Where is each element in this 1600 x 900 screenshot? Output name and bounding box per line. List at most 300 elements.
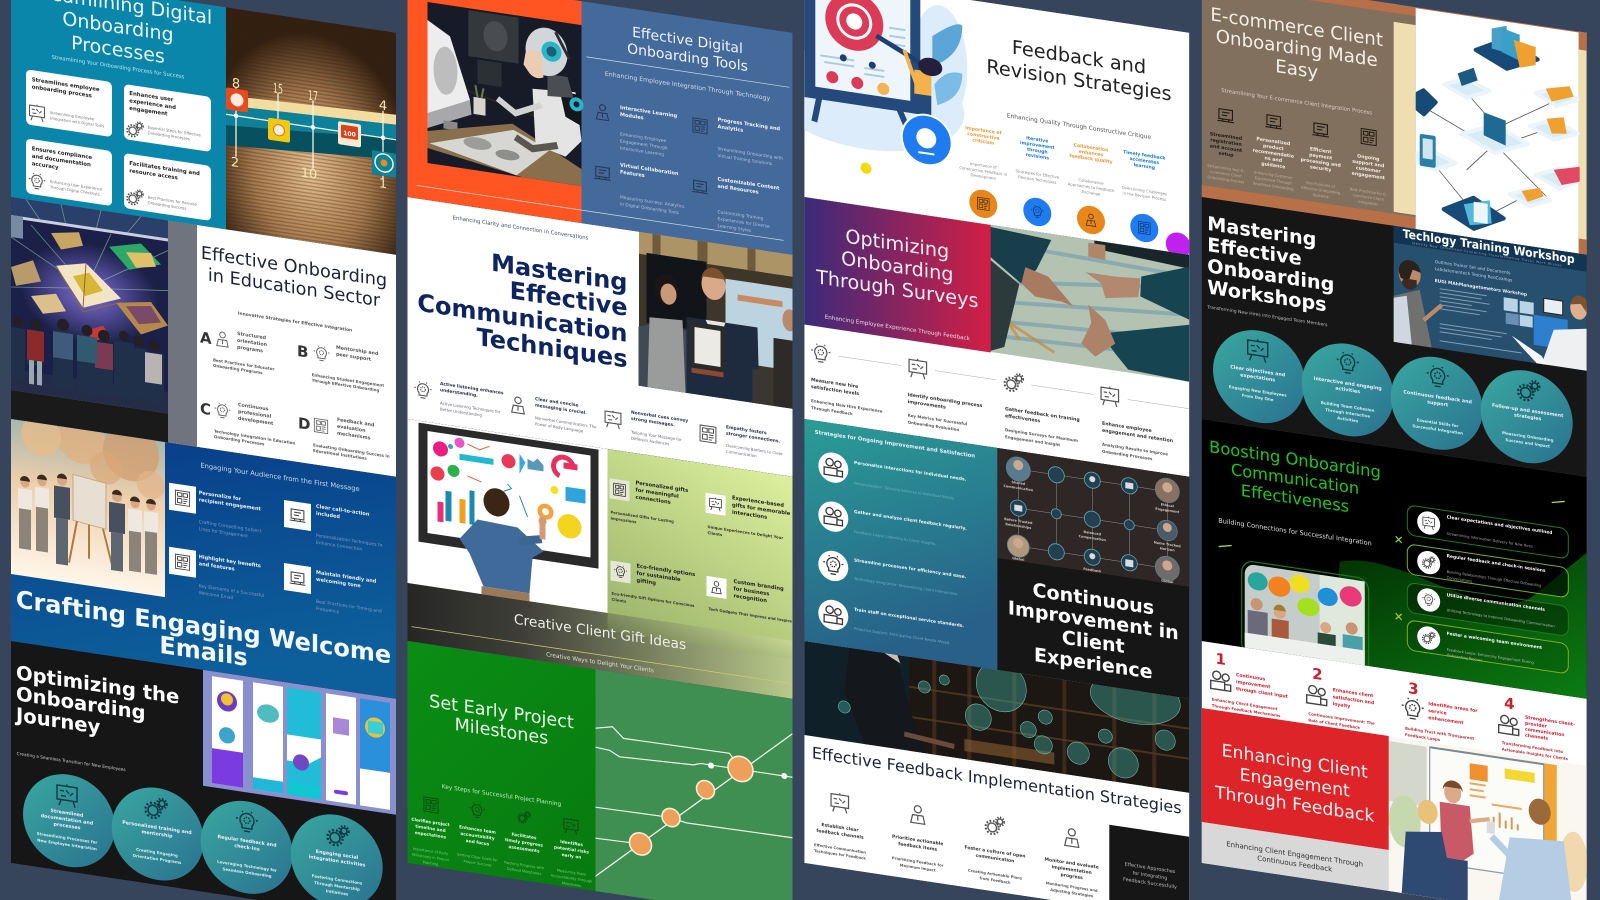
feature: recommendations [1253, 113, 1295, 192]
circle 1 [23, 774, 114, 868]
item: personalize: Personalize interactions for individual needs. [854, 460, 967, 483]
item: streamline processes: Technology Integration: Streamlining Client Interactions [853, 577, 957, 596]
benefit 2: 2 [1312, 665, 1323, 684]
card 1: onboarding process [32, 84, 92, 99]
circle 1: processes [54, 821, 81, 831]
subtitle: Engaging Your Audience from the First Message [200, 461, 360, 493]
circle 3: Seamless Onboarding [222, 866, 272, 879]
item: tracking and analytics: Streamlining Onboarding with [718, 146, 783, 162]
bubbles photo [804, 624, 1189, 793]
benefit 2 [1307, 664, 1375, 732]
item B [298, 345, 384, 392]
step: process improvements: Identify onboarding process [908, 392, 982, 409]
team photo with speech bubbles [1242, 560, 1369, 674]
title: E-commerce Client [1210, 4, 1383, 51]
subtitle: Creative Ways to Delight Your Clients [546, 652, 654, 674]
people network image: Relationships [1005, 522, 1031, 530]
step: satisfaction levels: Measure new hire [811, 377, 858, 390]
item D: evaluation [337, 424, 366, 434]
award photo [638, 232, 796, 409]
target illustration [764, 0, 967, 189]
benefit 1: Enhancing Client Engagement [1212, 697, 1278, 711]
strategy: prioritize items: Prioritizing Feedback for [892, 856, 944, 868]
item: learning modules [596, 101, 678, 160]
step: training effectiveness: Engagement and Insight [1005, 434, 1060, 447]
item C: Continuous [238, 402, 269, 413]
circle 1: New Employee Integration [37, 837, 97, 851]
item: welcoming team: Feedback Loops: Enhancing Engagement During [1447, 648, 1534, 665]
circle 4: Initiatives [326, 888, 349, 897]
feature: recommendations: recommendatio [1253, 148, 1295, 160]
heading: Strategies for Ongoing Improvement and Satisfaction [815, 430, 975, 460]
column 1 [11, 0, 396, 900]
title: Revision Strategies [986, 55, 1172, 106]
feature: recommendations: Seamless Onboarding [1253, 181, 1294, 192]
panel: Optimizing Onboarding Through Surveys [804, 197, 1189, 477]
card 1: Streamlining Employee [50, 110, 95, 122]
timeline image: 10 [301, 166, 317, 183]
title panel [1202, 708, 1389, 891]
title: Mastering [491, 249, 627, 297]
strategy: monitor progress: Monitor and evaluate [1045, 857, 1099, 871]
feature: registration: and account [1210, 143, 1243, 154]
step 4: early on [562, 852, 581, 861]
training workshop image: Techlogy Training Workshop [1403, 227, 1575, 266]
item: personalize [818, 450, 967, 503]
item: clear messaging: Power of Body Language [535, 421, 584, 433]
item: call-to-action: included [316, 511, 340, 520]
card 3: and documentation [32, 154, 91, 168]
feature: registration: setup [1219, 151, 1234, 159]
step 2: accountability [460, 831, 495, 842]
item A [200, 332, 274, 374]
step: process improvements: Key Metrics for Successful [908, 413, 968, 427]
step 4: Accountability Through [551, 874, 592, 884]
strategy: prioritize items: Maximum Impact [900, 863, 936, 873]
column: constructive criticism [959, 124, 1008, 222]
feature: payment: Key Features of [1306, 181, 1336, 189]
timeline image [226, 7, 396, 255]
item: key benefits: and features [199, 561, 235, 573]
circle 4 [291, 808, 383, 900]
item: regular feedback: Building Relationships Through Effective Onboarding [1447, 570, 1541, 588]
step: training effectiveness: Designing Surveys for Maximum [1005, 427, 1078, 443]
item: regular feedback [1407, 544, 1568, 598]
step: engagement and retention: Enhance employee [1102, 421, 1152, 434]
step 3: assessments [508, 844, 540, 855]
panel: Crafting Engaging Welcome Emails [11, 405, 396, 699]
item: personalized gifts [610, 476, 688, 532]
people network image: Horizon [1160, 546, 1175, 553]
item A: orientation [237, 338, 268, 348]
benefit 4: channels [1525, 733, 1548, 742]
item: call-to-action [284, 500, 382, 551]
item: clear expectations: Streamlining Information Delivery for New Hires [1447, 532, 1533, 549]
benefit 1 [1211, 649, 1289, 719]
item: tracking and analytics: Virtual Training Solutions [718, 153, 773, 167]
item: custom branding: recognition [734, 593, 767, 604]
step 1: expectations [415, 830, 447, 841]
item: personalized gifts: Personalized gifts [636, 480, 688, 494]
item B: B [297, 342, 308, 362]
item D: mechanisms [337, 431, 371, 442]
benefit 3: Building Trust with Transparent [1405, 726, 1474, 741]
title: Workshops [1207, 276, 1327, 316]
step 1: Planning [423, 860, 438, 867]
feature: payment: Efficient [1310, 146, 1332, 156]
benefit 3 [1402, 678, 1478, 748]
people network image: Ethical [1161, 502, 1174, 508]
panel: Continuous Improvement in Client Experience [804, 419, 1189, 699]
item: learning modules: Interactive Learning [620, 105, 678, 120]
item: experience-based gifts [706, 491, 791, 547]
circle 4 [1481, 364, 1573, 470]
timeline image: 100 [343, 130, 356, 139]
item: empathy [700, 420, 783, 462]
title: Enhancing Client [1222, 741, 1368, 783]
item: eco-friendly options [610, 559, 695, 614]
people network image: Communication [1003, 484, 1034, 492]
step 4: Milestones [562, 881, 581, 888]
subtitle box: Effective Approaches [1125, 862, 1176, 875]
benefit 1: through client input [1236, 686, 1289, 700]
circle 2 [1302, 337, 1394, 443]
circle 1: Clear objectives and [1230, 364, 1286, 379]
step: engagement and retention: engagement and retention [1102, 428, 1173, 444]
title: Effective [1207, 233, 1302, 270]
item: key benefits [169, 546, 264, 600]
item: nonverbal cues: Tailoring Your Message for [630, 429, 682, 442]
subtitle box: Feedback Successfully [1123, 877, 1177, 891]
card 1 [26, 69, 112, 137]
item A: Structured [237, 331, 267, 341]
subtitle box: for Integrating [1133, 870, 1167, 882]
column: collaboration [1068, 142, 1115, 238]
circle 1: Streamlined [51, 808, 84, 819]
title: Through Surveys [815, 265, 978, 313]
item A: programs [237, 345, 263, 354]
step 2: Project Success [464, 859, 492, 868]
benefit 4: Transforming Feedback into [1502, 740, 1563, 754]
item C: development [238, 416, 274, 427]
subtitle: Enhancing Client Engagement Through [1226, 839, 1363, 869]
column: timely feedback [1122, 149, 1167, 245]
subtitle: Key Steps for Successful Project Planning [442, 784, 561, 808]
feature: payment: payment [1309, 152, 1333, 162]
column: collaboration: feedback quality [1069, 153, 1113, 165]
subtitle: Creating a Seamless Transition for New Employees [17, 751, 126, 773]
item: key benefits: Welcome Email [199, 590, 233, 601]
item: call-to-action: Enhance Connection [316, 540, 362, 553]
item C: C [200, 399, 211, 419]
strategy: open communication: communication [976, 853, 1014, 864]
feature: support [1350, 127, 1388, 208]
title: in Education Sector [208, 265, 381, 311]
benefit 1: 1 [1215, 650, 1226, 669]
step 2: Enhances team [459, 824, 496, 836]
column: timely feedback: Overcoming Challenges [1122, 185, 1167, 196]
item: personalized gifts: Personalized Gifts for Lasting [610, 509, 674, 524]
column: collaboration: enhances [1079, 149, 1104, 158]
feature: recommendations: Enhancing Customer [1254, 170, 1293, 180]
panel: Creative Client Gift Ideas [408, 419, 792, 699]
item: nonverbal cues: Nonverbal cues convey [631, 410, 688, 424]
column: collaboration: Collaboration [1074, 142, 1108, 154]
title: Set Early Project [429, 692, 574, 733]
step 3 [503, 808, 544, 876]
circle 1: Engaging New Employees [1229, 384, 1287, 398]
people network image: Compensation [1079, 534, 1107, 542]
circle 3: check-ins [234, 843, 260, 853]
strategy: clear channels: Effective Communication [814, 843, 866, 855]
card 2 [124, 84, 211, 152]
strategy: prioritize items [892, 802, 944, 874]
circle 1: Streamlining Processes for [37, 831, 97, 845]
feature: support: Integration [1358, 200, 1379, 207]
item: personalized gifts: for meaningful [636, 487, 679, 500]
item C: Technology Integration in Education [214, 428, 295, 446]
benefit 3: enhancement [1428, 715, 1464, 726]
item: experience-based gifts: interactions [732, 510, 767, 521]
strategy: open communication: from Feedback [980, 876, 1011, 885]
item: clear messaging [512, 393, 597, 435]
item A: A [200, 328, 212, 348]
circle 4: Engaging social [316, 849, 359, 861]
feature: support: Ongoing [1357, 153, 1379, 163]
title: Onboarding [1207, 254, 1334, 296]
title: Onboarding [16, 682, 146, 725]
card 2: Enhances user [129, 91, 174, 103]
item D [299, 417, 390, 460]
circle 1 [1213, 324, 1305, 429]
column: collaboration: Approaches to Feedback [1068, 181, 1115, 193]
item: feedback analysis: Gather and analyze client feedback regularly. [854, 509, 967, 532]
training workshop image: Outlines Trainer Set and Documents [1435, 259, 1510, 275]
circle 4: Measuring Onboarding [1502, 430, 1554, 443]
title: Journey [14, 703, 100, 739]
title: Emails [159, 631, 248, 672]
circle 4: Follow-up and assessment [1492, 403, 1564, 419]
title: Optimizing [845, 225, 949, 263]
title: Effective Onboarding [201, 243, 387, 291]
feature: registration: Streamlining Your E- [1207, 164, 1245, 174]
timeline image: 15 [273, 81, 283, 98]
item: experience-based gifts: Experience-based [732, 495, 784, 509]
step 1: Milestones in Project [412, 853, 450, 862]
item D: Evaluating Onboarding Success in [313, 442, 390, 459]
circle 2: Activities [1337, 415, 1359, 424]
item: eco-friendly options: Clients [612, 597, 627, 604]
benefit 1: Through Feedback Mechanisms [1212, 703, 1281, 718]
step 3: Tracking Progress with [503, 860, 544, 870]
title: Boosting Onboarding [1209, 437, 1381, 482]
panel: Effective Digital Onboarding Tools [408, 0, 792, 255]
panel: Effective Feedback Implementation Strategies [804, 624, 1189, 900]
item: active listening [414, 377, 504, 421]
item: custom branding: Tech Gadgets That Impress and Inspire [708, 606, 792, 624]
people network image: Name Tracked [1154, 540, 1181, 549]
item: friendly tone: welcoming tone [316, 577, 361, 590]
subtitle box [1109, 825, 1189, 900]
whiteboard watercolor image [1389, 736, 1588, 900]
item: friendly tone [284, 563, 382, 614]
strategy: clear channels: feedback channels [816, 828, 864, 841]
panel: Streamlining Digital Onboarding Processes [11, 0, 396, 255]
feature: recommendations: Experience Through [1255, 176, 1293, 186]
strategy: prioritize items: feedback items [898, 841, 937, 853]
item: eco-friendly options: for sustainable [637, 571, 681, 583]
item D: D [298, 414, 310, 434]
column: timely feedback: learning [1134, 162, 1155, 171]
strategy: open communication: Creating Actionable Plans [968, 869, 1023, 881]
panel: Effective Onboarding in Education Sector [11, 197, 396, 477]
subtitle: Streamlining Your E-commerce Client Integration Process [1221, 88, 1372, 117]
feature: support: engagement [1352, 171, 1386, 182]
people network image: Before Trusted [1004, 517, 1033, 525]
step: satisfaction levels [811, 343, 883, 421]
title: Effective [510, 276, 627, 322]
item B: Enhancing Student Engagement [312, 372, 384, 388]
benefit 4: Actionable Insights for Clients [1502, 746, 1569, 761]
item D: Educational Institutions [313, 448, 367, 461]
item: personalize: Lines for Engagement [199, 526, 248, 540]
item: friendly tone: Best Practices for Timing and [316, 599, 382, 615]
step 1 [411, 795, 450, 868]
title: Client [1062, 626, 1125, 658]
circle 3 [200, 800, 292, 894]
panel: Mastering Effective Communication Techniques [408, 197, 796, 477]
item: communication channels: Utilizing Technology to Improve Onboarding Communication [1447, 608, 1555, 628]
title: Onboarding [841, 247, 953, 286]
subtitle: Streamlining Your Onboarding Process for Success [52, 55, 185, 81]
item B: peer support [336, 352, 372, 363]
item C: Onboarding Processes [214, 434, 265, 447]
item: feedback analysis [818, 499, 967, 552]
item: welcoming team: Onboarding Process [1447, 653, 1483, 663]
step: satisfaction levels: satisfaction levels [811, 384, 859, 397]
item: tracking and analytics: Progress Tracking and [718, 117, 781, 132]
item: call-to-action: Clear call-to-action [316, 504, 370, 518]
item: key benefits: Highlight key benefits [199, 554, 261, 569]
title: Continuous [1033, 578, 1154, 619]
panel: Optimizing the Onboarding Journey [11, 641, 396, 900]
subtitle: Enhancing Employee Integration Through Technology [605, 71, 770, 102]
step 4: potential risks [554, 844, 589, 856]
item: active listening: Active listening enhances [440, 381, 504, 396]
title: Optimizing the [16, 661, 179, 709]
item: personalized gifts: connections [636, 495, 671, 506]
feature: support: Best Practices for E- [1350, 187, 1388, 197]
item: communication channels: Utilize diverse communication channels [1447, 592, 1545, 613]
step 1: timeline and [415, 824, 446, 834]
circle 1: From Day One [1242, 393, 1274, 402]
step: satisfaction levels: Enhancing New Hire Experience [811, 398, 883, 414]
circle 3 [1391, 350, 1483, 456]
benefit 4: communication [1525, 727, 1565, 738]
circle 2: Orientation Programs [133, 853, 182, 865]
benefit 3: Feedback Loops [1405, 732, 1441, 742]
feature: recommendations: Personalized [1256, 136, 1290, 147]
strategy: clear channels [814, 789, 866, 861]
whiteboard image [408, 419, 608, 613]
title: Mastering [1207, 212, 1316, 251]
subtitle: Building Connections for Successful Integration [1218, 517, 1372, 547]
step: training effectiveness [1005, 372, 1080, 450]
feature: registration: Streamlined [1210, 131, 1242, 142]
step: engagement and retention: Analyzing Results to Improve [1102, 442, 1168, 457]
panel: E-commerce Client Onboarding Made Easy [1202, 0, 1587, 255]
circle 3: Regular feedback and [217, 834, 277, 849]
benefit 3: Identifies areas for [1428, 701, 1478, 714]
item A: Best Practices for Educator [213, 357, 274, 372]
feature: recommendations: product [1263, 143, 1284, 152]
benefit 2: Continuous Improvement: The [1308, 711, 1375, 726]
strategy: monitor progress: Adjusting Strategies [1050, 888, 1094, 898]
column: constructive criticism: Constructive Feedback in [959, 165, 1008, 177]
title band [408, 583, 792, 699]
card 1: Integration with Digital Tools [50, 115, 104, 128]
step 1: Importance of Early [413, 847, 449, 856]
card 4 [124, 153, 211, 221]
title: Crafting Engaging Welcome [16, 585, 391, 669]
item: empathy: stronger connections. [726, 431, 781, 445]
item: welcoming team: Foster a welcoming team environment [1447, 631, 1542, 651]
column: constructive criticism: criticism [972, 137, 995, 147]
library image [11, 197, 168, 443]
item: eco-friendly options: Eco-friendly options [637, 563, 695, 578]
column: collaboration: Exchange [1082, 189, 1101, 197]
item: nonverbal cues: strong messages. [631, 416, 675, 428]
strategy: open communication: Foster a culture of open [965, 845, 1025, 860]
item: virtual collaboration: Measuring Success: Analytics [620, 194, 685, 210]
item: personalize: Crafting Compelling Subject [199, 519, 262, 535]
item: tracking and analytics: Analytics [718, 124, 743, 134]
item: custom branding: for business [734, 586, 769, 597]
circle 3: Continuous feedback and [1403, 389, 1473, 406]
circle 2: Through Interactive [1325, 407, 1370, 419]
training workshop image [1394, 225, 1587, 371]
people network image: Global [1012, 556, 1024, 562]
step: engagement and retention: Onboarding Processes [1102, 449, 1153, 461]
circle 2: mentorship [142, 829, 173, 840]
step: process improvements [908, 357, 982, 436]
strategy: clear channels: Techniques for Feedback [814, 849, 866, 861]
robot artist image [428, 2, 584, 186]
subtitle: Enhancing Quality Through Constructive Critique [1007, 112, 1151, 141]
subtitle: Enhancing Clarity and Connection in Conversations [453, 215, 589, 242]
strategy: prioritize items: Prioritize actionable [892, 834, 943, 847]
step 3: timely progress [505, 837, 543, 849]
item: customizable content: Learning Styles [718, 223, 752, 234]
item: streamline processes [818, 549, 967, 601]
step 2: Setting Clear Goals for [457, 852, 498, 863]
card 4: Facilitates training and [129, 161, 200, 177]
item: friendly tone: Frequency [316, 606, 340, 615]
card 3: Enhancing User Experience [50, 179, 103, 192]
item: personalize [169, 483, 262, 542]
title: Processes [71, 31, 165, 68]
item: regular feedback: Conversations [1447, 576, 1472, 584]
strategy: monitor progress: progress [1061, 872, 1083, 881]
feature: payment: Systems [1313, 193, 1329, 199]
step 4: Measuring Team [557, 868, 587, 877]
card 2: Essential Steps for Effective [148, 125, 201, 138]
item: clear expectations [1407, 505, 1568, 559]
strategy: monitor progress: implementation [1052, 864, 1092, 876]
item: experience-based gifts: Clients [708, 530, 723, 537]
item: active listening: Active Listening Techniques for [440, 400, 501, 414]
item: streamline processes: Streamline processes for efficiency and ease. [854, 557, 967, 580]
